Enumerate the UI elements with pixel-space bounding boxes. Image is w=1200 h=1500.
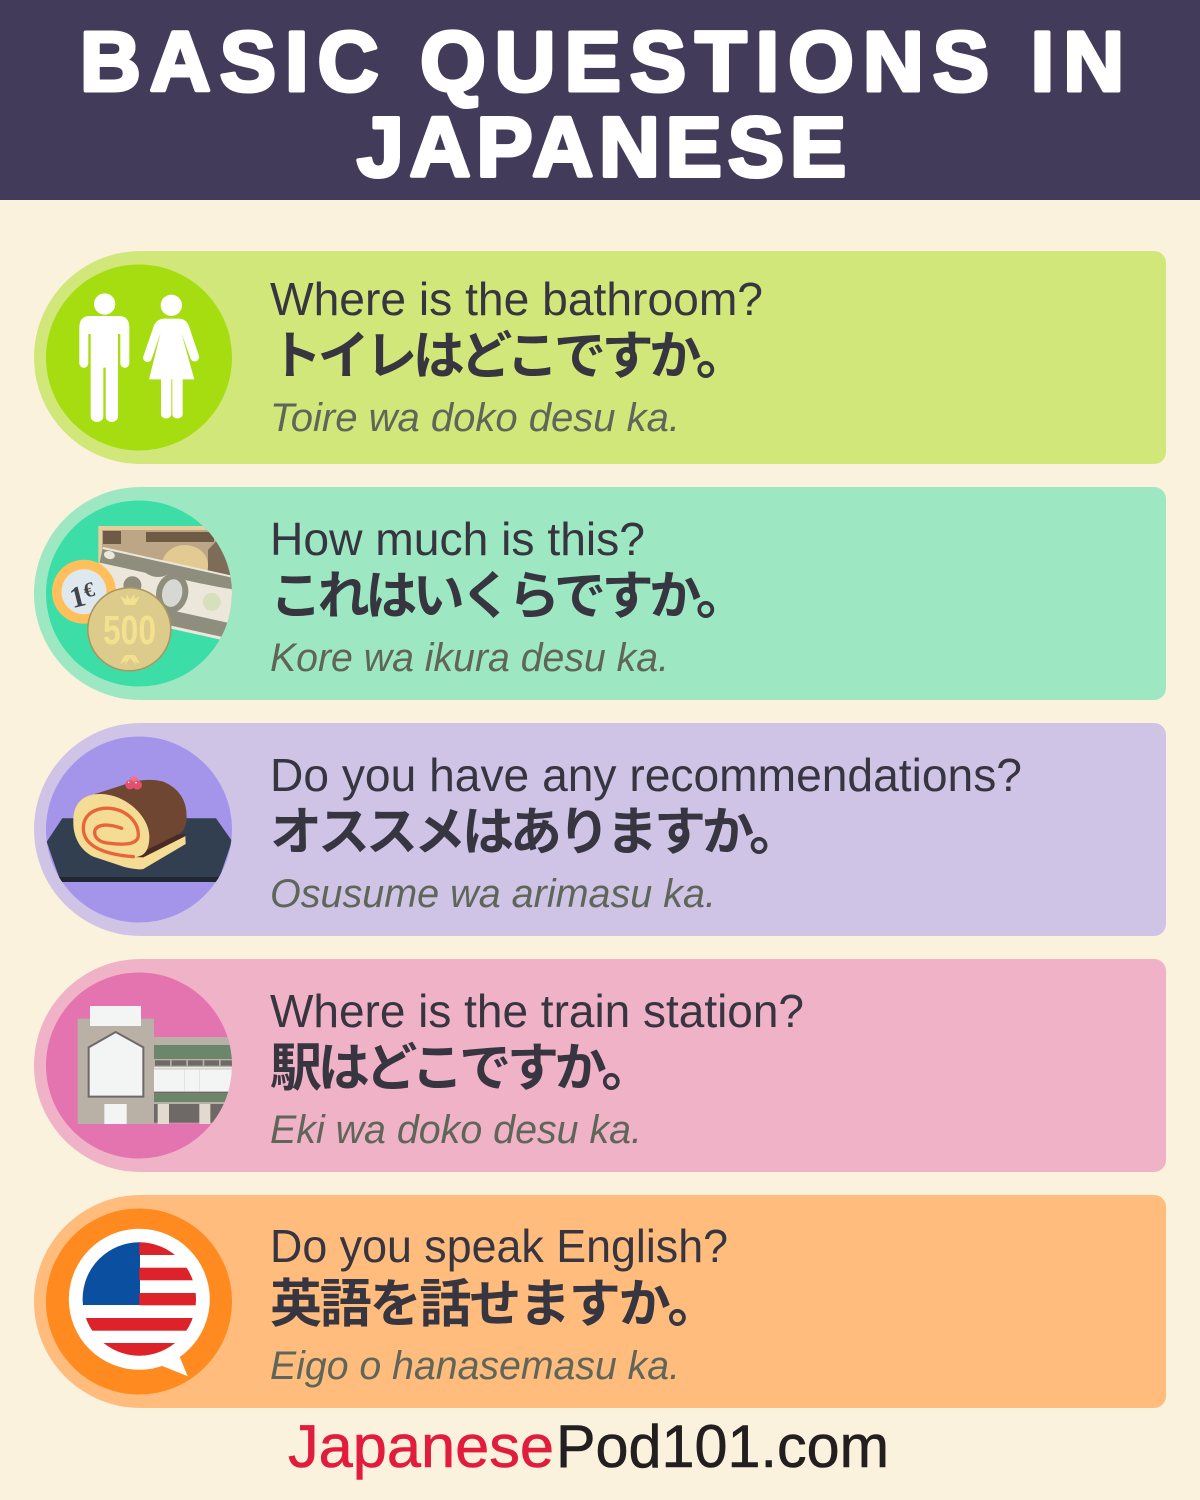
footer logo <box>288 1413 889 1480</box>
icon: speech bubble with US flag <box>46 1208 232 1394</box>
romaji: Toire wa doko desu ka. <box>270 396 680 440</box>
icon: yen banknotes and coins: 1 <box>66 579 89 615</box>
romaji: Kore wa ikura desu ka. <box>270 636 669 680</box>
title line 2: JAPANESE <box>357 100 846 194</box>
panel: recommendation question <box>34 723 1166 936</box>
English question: Do you speak English? <box>270 1220 728 1272</box>
icon: train station building <box>46 972 234 1158</box>
icon: roll cake on a tray <box>46 736 232 922</box>
Japanese question: オススメはありますか。 <box>270 804 797 862</box>
panel: bathroom question <box>34 251 1166 464</box>
English question: Where is the train station? <box>270 985 804 1037</box>
brand name in red: Japanese <box>288 1413 554 1480</box>
icon: yen banknotes and coins: 500 <box>103 607 156 653</box>
romaji: Eki wa doko desu ka. <box>270 1108 642 1152</box>
English question: Where is the bathroom? <box>270 273 763 325</box>
panel: English question <box>34 1195 1166 1408</box>
romaji: Eigo o hanasemasu ka. <box>270 1344 680 1388</box>
icon: man and woman restroom symbols <box>46 264 232 450</box>
Japanese question: 英語を話せますか。 <box>270 1276 717 1334</box>
panel: price question <box>34 487 1166 700</box>
title banner <box>0 0 1200 200</box>
romaji: Osusume wa arimasu ka. <box>270 872 716 916</box>
Japanese question: 駅はどこですか。 <box>270 1040 649 1098</box>
Japanese question: トイレはどこですか。 <box>270 328 743 386</box>
panel: train station question <box>34 959 1166 1172</box>
Japanese question: これはいくらですか。 <box>270 568 743 626</box>
title line 1: BASIC QUESTIONS IN <box>80 14 1124 108</box>
icon: yen banknotes and coins <box>46 500 240 686</box>
English question: Do you have any recommendations? <box>270 749 1022 801</box>
icon: yen banknotes and coins: € <box>81 577 97 603</box>
domain in black: Pod101.com <box>556 1413 889 1480</box>
English question: How much is this? <box>270 513 645 565</box>
